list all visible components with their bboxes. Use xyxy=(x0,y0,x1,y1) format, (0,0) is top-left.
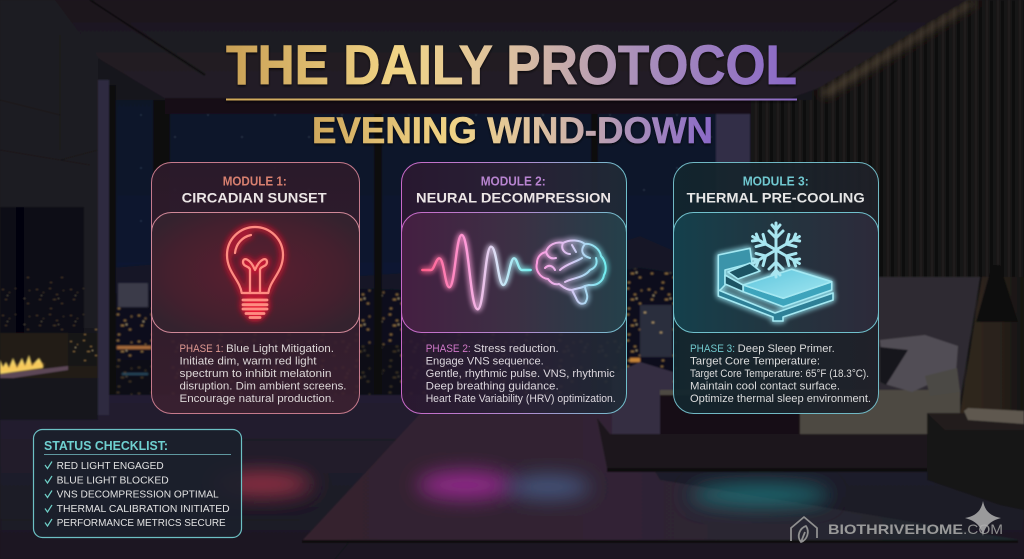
wall-mounted screen xyxy=(0,207,84,335)
title block xyxy=(226,33,797,151)
sheer curtain xyxy=(716,100,750,270)
watermark logo xyxy=(791,501,1003,542)
panel: module 3 thermal pre-cooling xyxy=(674,162,878,414)
wordmark: BIOTHRIVEHOME xyxy=(828,521,963,537)
phase 2 description: Deep breathing guidance. xyxy=(426,380,559,392)
checklist items: PERFORMANCE METRICS SECURE xyxy=(57,518,226,529)
module 1 heading: CIRCADIAN SUNSET xyxy=(182,190,327,206)
phase 3 description: Target Core Temperature: xyxy=(690,356,820,368)
panel: module 1 circadian sunset xyxy=(152,162,360,414)
module 2 label: MODULE 2: xyxy=(481,175,546,189)
module 3 heading: THERMAL PRE-COOLING xyxy=(687,190,865,206)
checklist items: BLUE LIGHT BLOCKED xyxy=(57,475,169,486)
rug xyxy=(302,414,1020,543)
phase 2 description: Stress reduction. xyxy=(474,343,559,355)
phase 2 description xyxy=(426,343,616,405)
phase 3 description: Maintain cool contact surface. xyxy=(690,380,840,392)
ceiling xyxy=(55,0,967,98)
bedside lamp xyxy=(976,265,1018,322)
right wall xyxy=(812,0,1024,420)
window mullions xyxy=(108,85,598,405)
icon: cooled bed xyxy=(718,248,833,321)
checklist items: RED LIGHT ENGAGED xyxy=(57,461,164,472)
phase 1 description: disruption. Dim ambient screens. xyxy=(180,380,346,392)
phase 1 description: spectrum to inhibit melatonin xyxy=(180,368,332,380)
icon: house with leaf xyxy=(791,517,817,542)
bed xyxy=(597,277,1024,472)
title underline xyxy=(226,98,797,100)
image panel: cooled bed background xyxy=(674,212,878,332)
stone wall xyxy=(0,0,98,420)
subtitle: EVENING WIND-DOWN xyxy=(312,110,713,151)
window with night sky xyxy=(110,100,750,400)
phase 3 label: PHASE 3: xyxy=(690,343,735,355)
icon: neon brain xyxy=(537,240,606,304)
phase 3 description: Target Core Temperature: 65°F (18.3°C). xyxy=(690,368,869,380)
panel: status checklist xyxy=(34,430,242,538)
panel: module 2 neural decompression xyxy=(402,162,626,414)
phase 2 description: Engage VNS sequence. xyxy=(426,356,544,368)
phase 1 label: PHASE 1: xyxy=(180,343,224,355)
icon: sparkle xyxy=(965,501,1001,536)
checklist items xyxy=(57,461,230,529)
phase 2 label: PHASE 2: xyxy=(426,343,471,355)
image panel: waveform and brain background xyxy=(402,212,626,332)
phase 3 description xyxy=(690,343,871,405)
icon: neon pulse wave xyxy=(422,235,531,309)
phase 1 description: Blue Light Mitigation. xyxy=(226,343,334,355)
floor xyxy=(0,395,1024,559)
phase 2 description: Gentle, rhythmic pulse. VNS, rhythmic xyxy=(426,368,615,380)
module 1 label: MODULE 1: xyxy=(223,175,287,189)
phase 1 description: Encourage natural production. xyxy=(180,393,334,405)
nightstand xyxy=(927,408,1024,510)
module 2 heading: NEURAL DECOMPRESSION xyxy=(416,190,611,206)
image panel: bulb background xyxy=(152,212,360,332)
watermark logo: .COM xyxy=(963,521,1003,537)
checklist items: THERMAL CALIBRATION INITIATED xyxy=(57,504,230,515)
phase 1 description: Initiate dim, warm red light xyxy=(180,356,316,368)
icon: snowflake xyxy=(749,223,803,277)
fireplace xyxy=(0,328,98,420)
phase 1 description xyxy=(180,343,346,405)
module 3 label: MODULE 3: xyxy=(743,175,809,189)
phase 2 description: Heart Rate Variability (HRV) optimization. xyxy=(426,393,616,405)
checklist items: VNS DECOMPRESSION OPTIMAL xyxy=(57,490,219,501)
checklist heading: STATUS CHECKLIST: xyxy=(44,438,168,453)
icon: neon light bulb xyxy=(227,227,283,318)
check marks xyxy=(45,462,52,526)
main title: THE DAILY PROTOCOL xyxy=(226,33,797,96)
phase 3 description: Deep Sleep Primer. xyxy=(738,343,835,355)
phase 3 description: Optimize thermal sleep environment. xyxy=(690,393,871,405)
